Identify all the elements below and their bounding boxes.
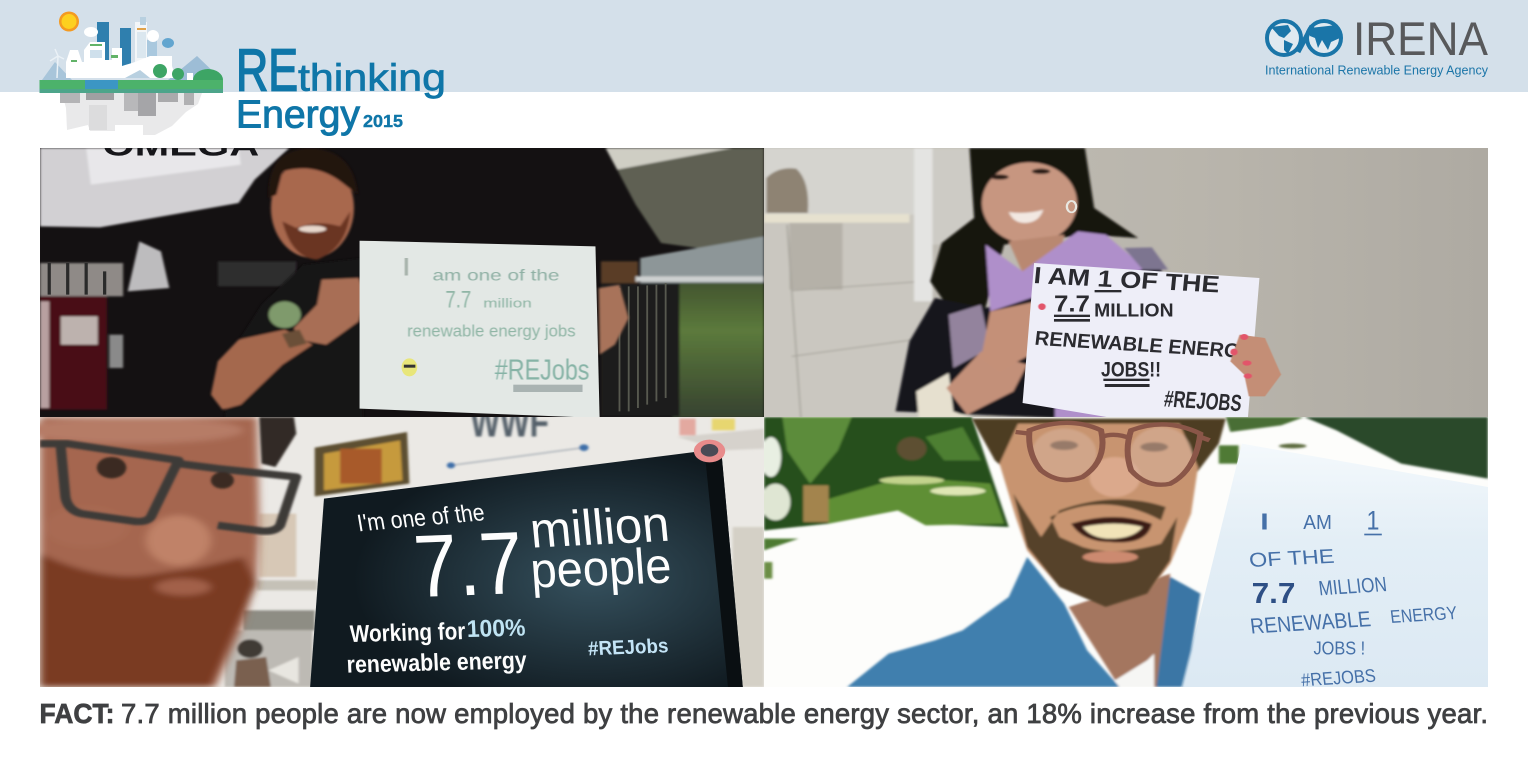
illustration: green ground band [40,80,223,93]
white paper with message: AM [1303,511,1332,534]
fact sentence: 7.7 million people are now employed by the renewable energy sector, an 18% increase from the previous year. [121,698,1488,729]
white sign: renewable energy jobs [407,322,576,340]
Energy: Energy [236,94,361,136]
white sign [360,241,600,418]
fence bars [49,263,666,411]
white paper with message: JOBS ! [1313,638,1365,658]
garden background [761,417,1488,579]
icon: sun [59,12,79,32]
white paper with message: I [1258,508,1271,535]
monitor message: 100% [466,615,526,643]
thinking: thinking [298,58,446,100]
scene background [40,148,764,418]
white sign: #REJobs [495,355,589,386]
white paper with message: #REJOBS [1300,665,1377,690]
fact caption [40,698,1488,729]
illustration: wind turbine and mountains [42,49,222,80]
illustration: trees [153,64,223,91]
white paper with message [1182,444,1488,690]
white paper with message: 7.7 [1252,578,1295,610]
office wall items: WWF [470,398,549,445]
round glasses [1016,423,1210,485]
white sign: MILLION [1094,300,1174,320]
white paper with message: RENEWABLE [1249,606,1372,639]
monitor message: renewable energy [346,647,527,678]
photo: smiling man with glasses in garden holding paper [764,417,1488,690]
man face [22,417,296,687]
monitor [310,440,743,687]
OMEGA lettering: OMEGA [102,128,259,162]
office wall items [225,398,764,687]
white sign: RENEWABLE ENERG [1034,327,1241,363]
monitor message: 7.7 [410,513,527,616]
earring [1067,201,1076,212]
agency name: International Renewable Energy Agency [1265,64,1489,78]
monitor message: #REJobs [587,635,669,660]
white paper with message: OF THE [1248,545,1335,572]
white sign: am one of the [432,267,559,285]
logo: REthinking Energy city illustration [40,12,223,135]
white paper with message: 1 [1367,506,1379,535]
woman figure [896,148,1168,418]
monitor message: million [527,495,672,558]
blue sweater [847,557,1200,687]
white paper with message: MILLION [1317,573,1388,600]
office background [764,148,979,418]
white sign: million [483,296,532,311]
head [972,419,1226,607]
2015: 2015 [363,111,403,131]
icon: infinity globes [1267,21,1341,55]
white sign [1023,262,1259,418]
white sign: I [402,254,411,281]
illustration: city skyline [66,17,176,78]
illustration: grey city reflection [60,93,202,135]
white sign: 7.7 [1054,290,1090,316]
IRENA wordmark: IRENA [1353,13,1488,66]
header band [0,0,1528,92]
man figure [847,419,1226,687]
man figure [211,148,629,418]
photo: man with white sign under airship [40,128,764,417]
white sign: JOBS!! [1101,356,1161,381]
logo: IRENA [1265,13,1489,78]
white sign: 7.7 [445,287,471,313]
monitor message: I'm one of the [355,500,487,537]
FACT label: FACT: [40,698,114,729]
RE: RE [236,38,298,104]
glasses [40,444,296,531]
photo: bearded man beside monitor [40,398,764,687]
monitor message: people [528,537,673,598]
right hand [1038,303,1281,396]
monitor message [346,495,673,678]
photo: woman with purple scarf holding sign [764,148,1488,417]
monitor message: Working for [349,618,466,648]
white sign: I AM 1 OF THE [1033,262,1221,297]
logo wordmark: REthinking Energy 2015 [236,38,446,136]
